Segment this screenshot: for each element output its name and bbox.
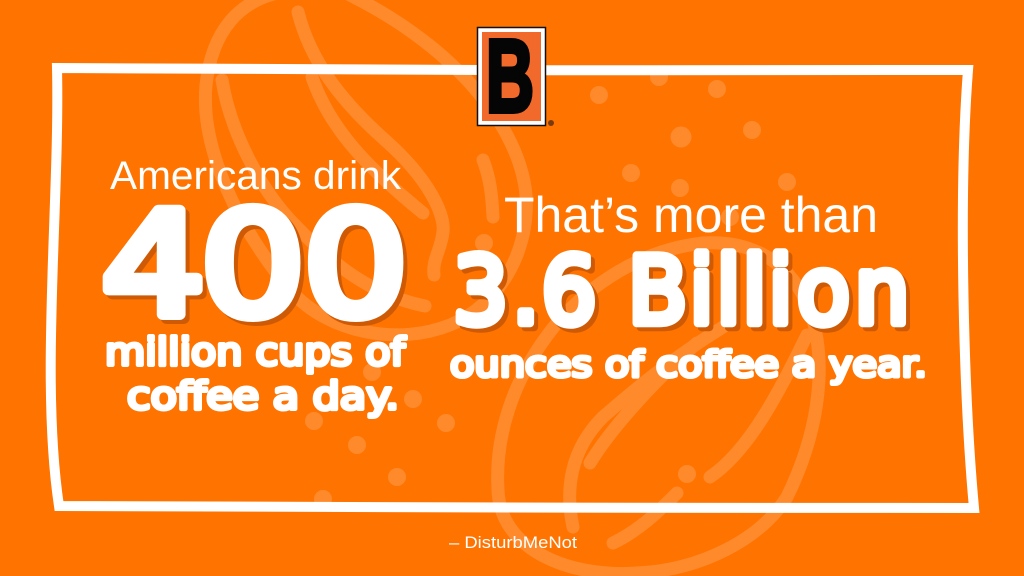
million cups of coffee a day: million cups of — [105, 330, 407, 374]
logo badge: B — [486, 18, 534, 134]
big number 400: 400 — [101, 183, 408, 349]
bottom coffee bean outline — [498, 243, 819, 574]
right statement heading: That’s more than — [504, 187, 878, 243]
scattered coffee dots — [305, 68, 796, 508]
million cups of coffee a day — [105, 330, 407, 418]
big number 3.6 Billion: 3.6 Billion — [453, 238, 909, 346]
hand-drawn white frame — [51, 68, 974, 508]
top coffee bean outline — [205, 0, 526, 335]
ounces of coffee a year: ounces of coffee a year. — [450, 344, 927, 386]
million cups of coffee a day: coffee a day. — [127, 374, 399, 418]
source credit: – DisturbMeNot — [449, 533, 577, 552]
left statement heading: Americans drink — [110, 154, 402, 198]
